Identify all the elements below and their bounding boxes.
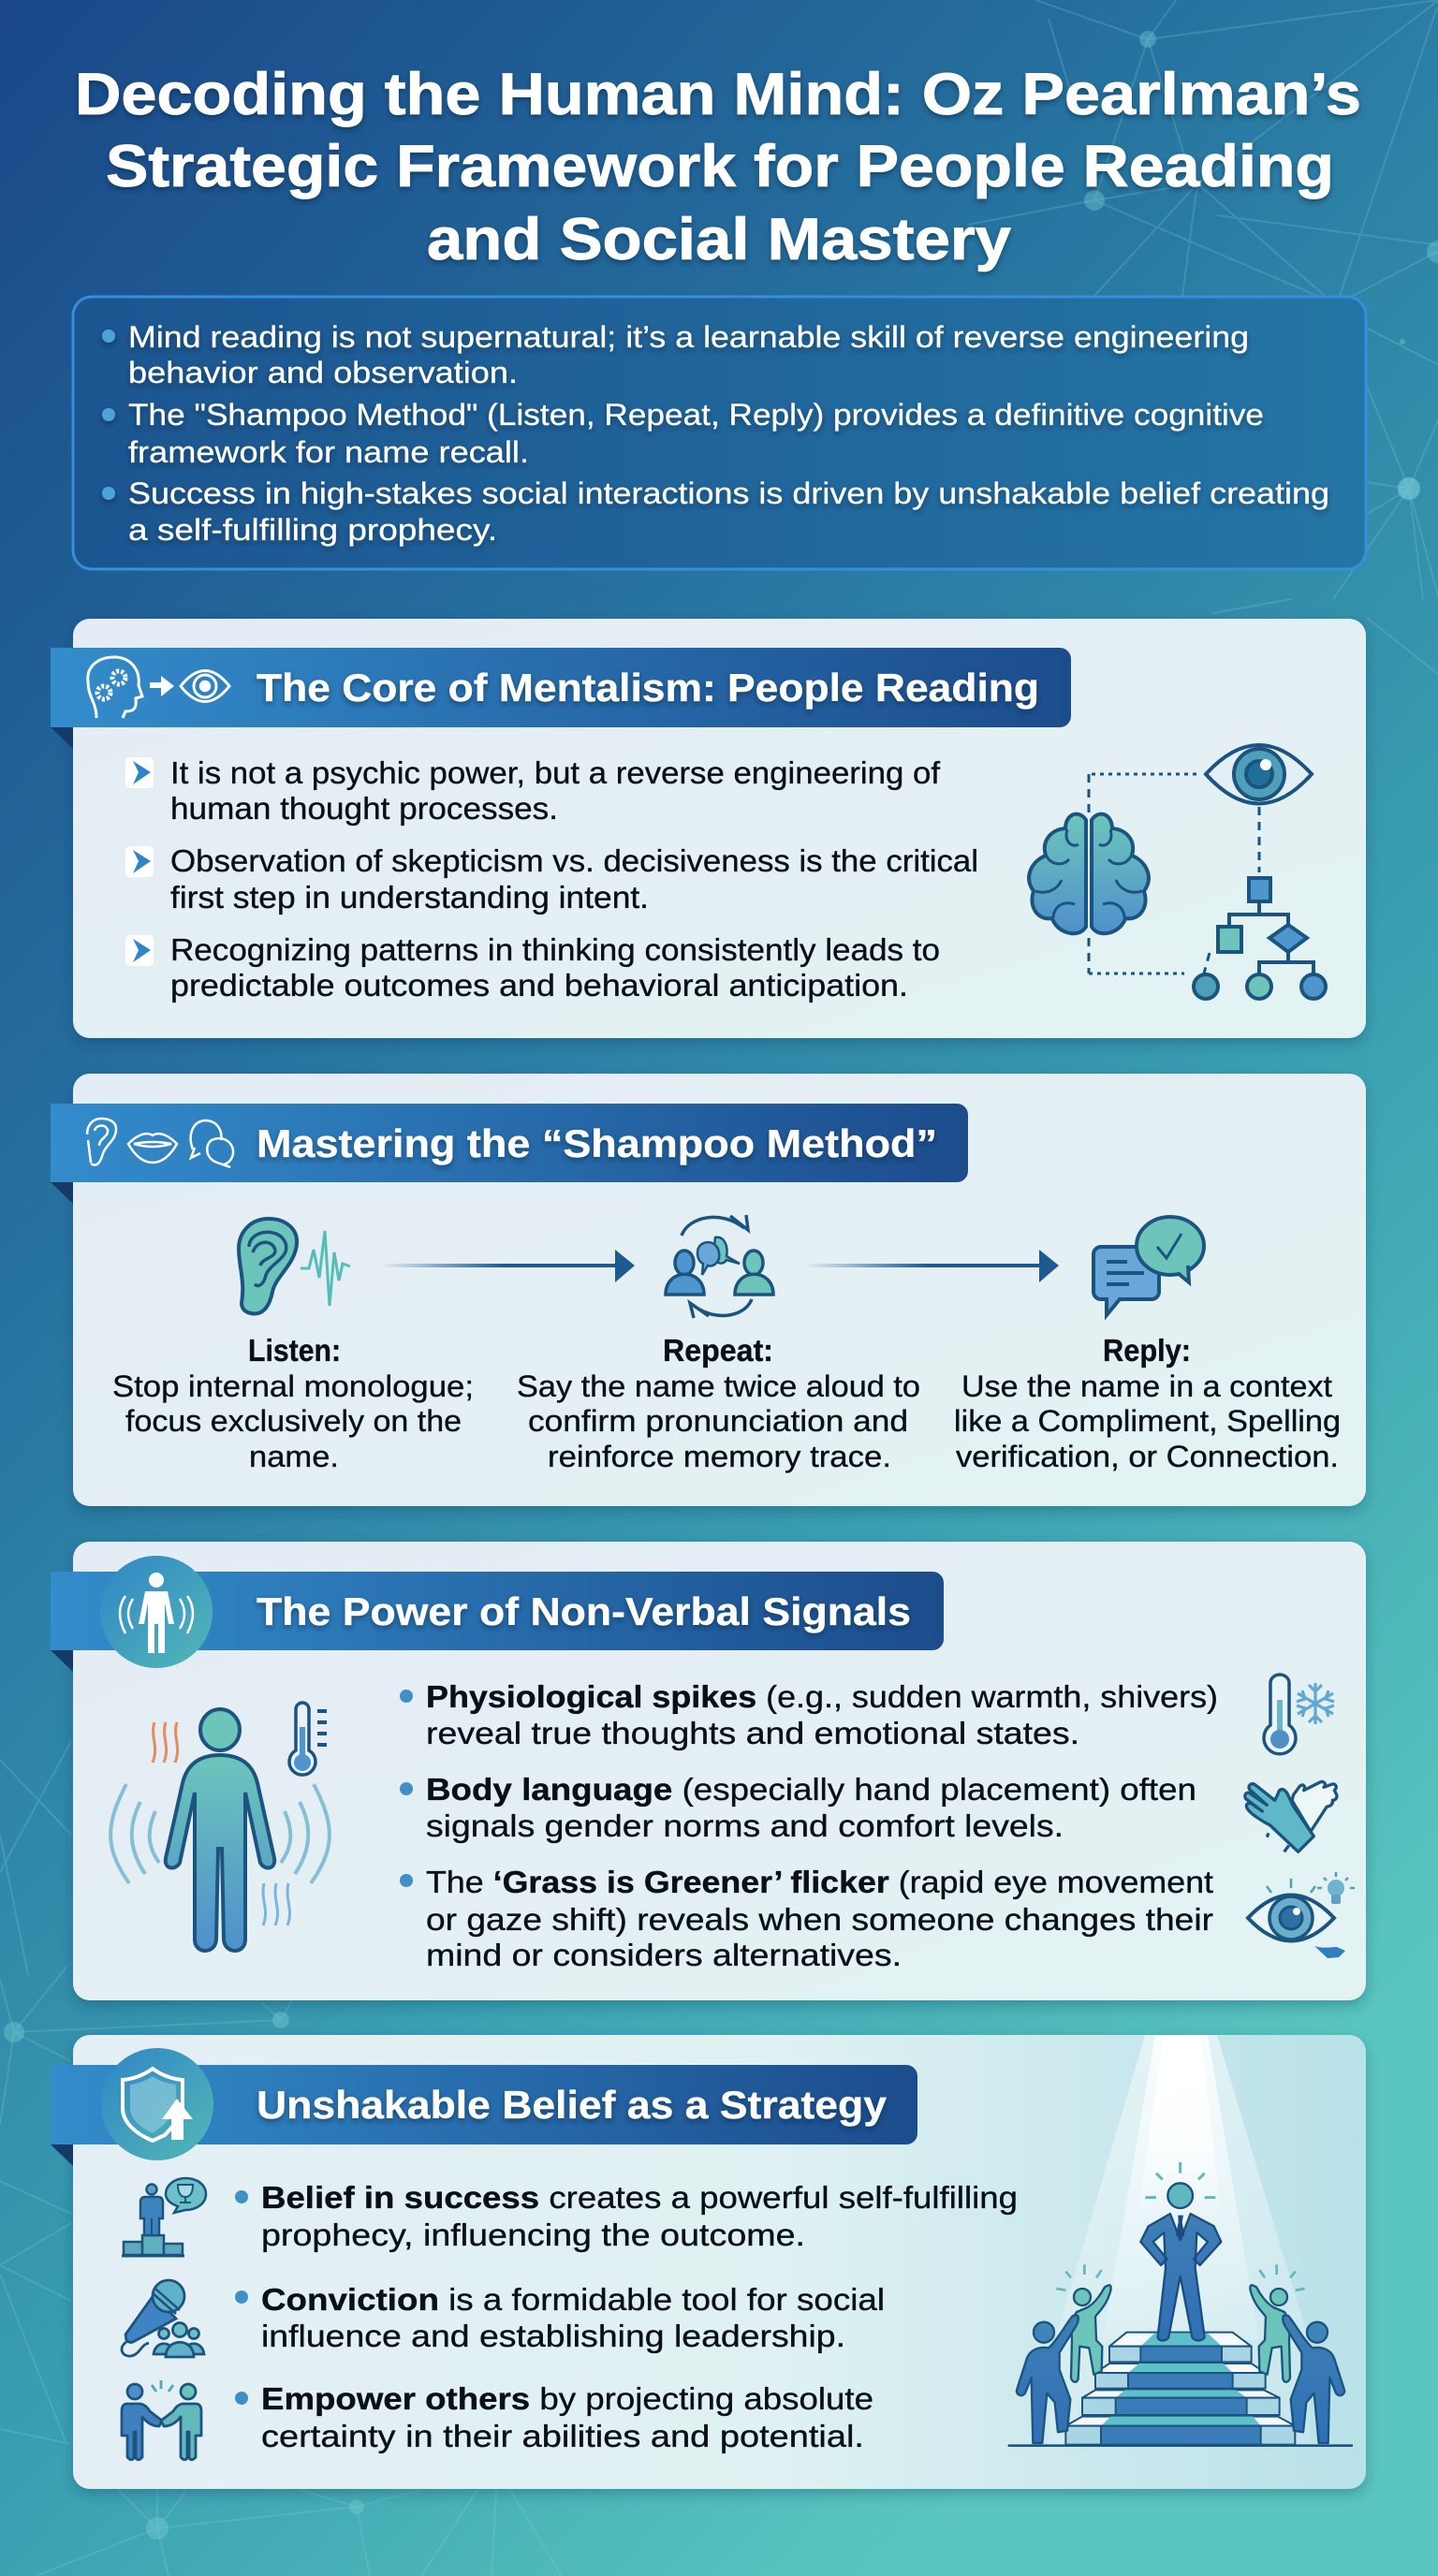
icon: people exchanging speech (666, 1215, 773, 1318)
signal waves (110, 1784, 330, 1883)
bullet: physiological spikes: Physiological spikes (e.g., sudden warmth, shivers) (426, 1679, 1218, 1714)
key takeaway 2: framework for name recall. (128, 435, 529, 469)
figure body (166, 1709, 274, 1951)
key takeaway 1: Mind reading is not supernatural; it’s a learnable skill of reverse engineering (128, 320, 1249, 354)
bullet: conviction: influence and establishing leadership. (261, 2319, 845, 2353)
bullet: belief in success: Belief in success creates a powerful self-fulfilling (261, 2180, 1018, 2215)
step: listen: Listen: (248, 1333, 341, 1368)
bullet: reverse engineering: It is not a psychic power, but a reverse engineering of (170, 755, 941, 790)
spotlight (1049, 2035, 1311, 2446)
step: reply: Use the name in a context (961, 1369, 1332, 1403)
step: repeat: Repeat: (663, 1333, 773, 1368)
bullet: conviction (235, 2282, 885, 2353)
bullet: empower others (235, 2381, 873, 2453)
icon: head with gears, arrow and eye (88, 657, 229, 718)
panel: shampoo method (51, 1074, 1366, 1506)
title: Decoding the Human Mind: Oz Pearlman’s (75, 62, 1361, 127)
bullet: belief in success: prophecy, influencing the outcome. (261, 2217, 805, 2252)
step: repeat: Say the name twice aloud to (517, 1369, 920, 1403)
icon: podium with trophy speech bubble (122, 2178, 206, 2256)
title: and Social Mastery (427, 207, 1011, 272)
heading ribbon: non-verbal signals: The Power of Non-Verbal Signals (257, 1589, 911, 1633)
illustration: human figure with signals (110, 1703, 330, 1951)
heading ribbon: core of mentalism (51, 648, 1071, 749)
key takeaway 3 (102, 476, 1329, 547)
step: reply: verification, or Connection. (956, 1440, 1339, 1473)
bullet: reverse engineering (125, 755, 941, 826)
key takeaway 1 (102, 320, 1249, 389)
bullet: empower others: Empower others by projecting absolute (261, 2381, 873, 2416)
key takeaway 3: Success in high-stakes social interactions is driven by unshakable belief creating (128, 476, 1329, 510)
icon: eye with lightbulb (1248, 1872, 1355, 1958)
connector lines (1089, 774, 1259, 973)
bullet: recognizing patterns: predictable outcomes and behavioral anticipation. (170, 968, 908, 1003)
bullet: body language: Body language (especially hand placement) often (426, 1772, 1196, 1807)
bullet: recognizing patterns (125, 932, 940, 1003)
heading ribbon: unshakable belief: Unshakable Belief as a Strategy (257, 2083, 888, 2127)
illustration: brain, eye and decision tree (1029, 745, 1326, 999)
title: Strategic Framework for People Reading (106, 134, 1334, 199)
supporters right (1250, 2264, 1344, 2443)
icon: shield with up arrow (101, 2048, 213, 2160)
bullet: observation: Observation of skepticism vs. decisiveness is the critical (170, 843, 978, 878)
step: repeat (517, 1215, 920, 1473)
panel: key takeaways (73, 297, 1366, 569)
illustration: leader on stairs with supporters (1008, 2162, 1353, 2446)
bullet: reverse engineering: human thought processes. (170, 791, 558, 826)
body thermometer (289, 1703, 327, 1775)
icon: handshake figures (122, 2380, 201, 2460)
icon: brain (1029, 814, 1149, 933)
bullet: observation (125, 843, 978, 915)
bullet: grass is greener: The ‘Grass is Greener’ flicker (rapid eye movement (426, 1865, 1213, 1899)
panel: non-verbal signals (51, 1542, 1366, 2000)
bullet: grass is greener: or gaze shift) reveals when someone changes their (426, 1902, 1213, 1937)
supporters left (1017, 2264, 1111, 2443)
step: repeat: reinforce memory trace. (548, 1440, 891, 1473)
icon: ear with sound wave (239, 1219, 350, 1314)
panel: unshakable belief (51, 2035, 1366, 2489)
heading ribbon: core of mentalism: The Core of Mentalism: People Reading (257, 666, 1039, 710)
icon: eye (1206, 745, 1312, 803)
icon: hands (1245, 1781, 1337, 1852)
icon: person with signal waves (100, 1556, 213, 1668)
icon: thermometer and snowflake (1264, 1675, 1334, 1754)
bullet: observation: first step in understanding intent. (170, 880, 649, 915)
bullet: body language (400, 1772, 1196, 1843)
heading ribbon: non-verbal signals (51, 1556, 944, 1672)
step: listen: name. (249, 1440, 339, 1473)
key takeaway 2: The "Shampoo Method" (Listen, Repeat, Reply) provides a definitive cognitive (128, 398, 1264, 432)
bullet: physiological spikes: reveal true thoughts and emotional states. (426, 1716, 1079, 1750)
arrow: repeat to reply (805, 1250, 1059, 1282)
main figure (1140, 2162, 1221, 2340)
stairs (1008, 2333, 1353, 2446)
key takeaway 3: a self-fulfilling prophecy. (128, 513, 497, 547)
icons: ear, lips, speech bubbles (87, 1119, 233, 1167)
title (75, 62, 1361, 272)
key takeaway 2 (102, 398, 1264, 469)
heading ribbon: shampoo method (51, 1104, 968, 1204)
bullet: empower others: certainty in their abilities and potential. (261, 2419, 864, 2453)
heat lines (153, 1722, 178, 1763)
icon: chat bubbles with check (1093, 1217, 1204, 1315)
bullet: conviction: Conviction is a formidable tool for social (261, 2282, 885, 2317)
bullet: belief in success (235, 2180, 1018, 2252)
step: repeat: confirm pronunciation and (528, 1404, 908, 1438)
key takeaway 1: behavior and observation. (128, 356, 518, 389)
icon: microphone with audience (122, 2280, 204, 2357)
bullet: grass is greener (400, 1865, 1213, 1972)
step: reply: Reply: (1103, 1333, 1191, 1368)
panel: the core of mentalism (51, 619, 1366, 1038)
step: reply (954, 1217, 1341, 1473)
bullet: grass is greener: mind or considers alternatives. (426, 1938, 902, 1972)
step: listen (112, 1219, 474, 1473)
step: reply: like a Compliment, Spelling (954, 1404, 1341, 1438)
bullet: body language: signals gender norms and comfort levels. (426, 1808, 1064, 1843)
bullet: physiological spikes (400, 1679, 1218, 1750)
bullet: recognizing patterns: Recognizing patterns in thinking consistently leads to (170, 932, 940, 967)
step: listen: focus exclusively on the (125, 1404, 462, 1438)
heading ribbon: shampoo method: Mastering the “Shampoo Method” (257, 1121, 937, 1165)
heading ribbon: unshakable belief (51, 2048, 917, 2166)
arrow: listen to repeat (381, 1250, 635, 1282)
decision tree (1194, 878, 1326, 999)
step: listen: Stop internal monologue; (112, 1369, 474, 1403)
